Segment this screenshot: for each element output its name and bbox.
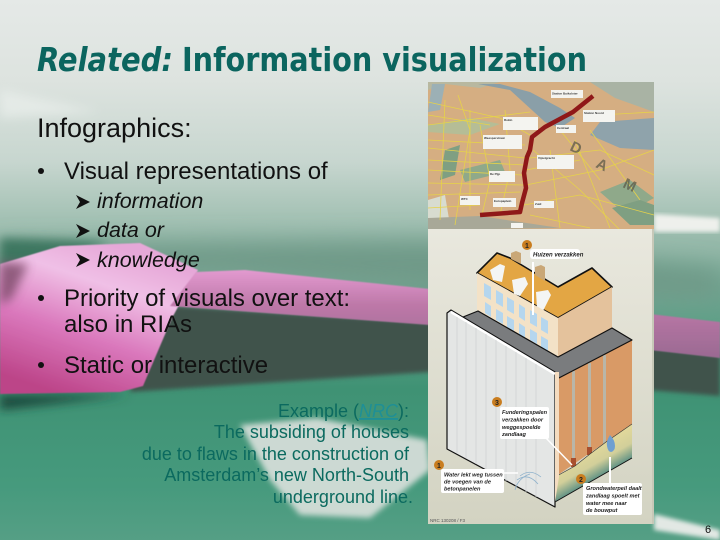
bullet: priority of visuals: Priority of visuals over text:	[64, 285, 350, 312]
bullet: visual representations: Visual representations of	[64, 158, 328, 185]
bullet: priority of visuals: also in RIAs	[64, 311, 192, 338]
callout: groundwater: Grondwaterpeil daalt	[586, 486, 643, 492]
page number: 6	[705, 524, 711, 536]
station labels	[460, 90, 615, 228]
credit: NRC 130208 / F3	[430, 518, 466, 523]
callout: foundation piles: Funderingspalen	[502, 410, 548, 416]
station labels: WTC	[461, 197, 469, 201]
callout: water leaks: Water lekt weg tussen	[444, 472, 503, 478]
marker 2: 2	[579, 477, 583, 484]
map lettering	[567, 138, 639, 196]
callout: groundwater	[583, 457, 643, 515]
station labels: Rokin	[504, 118, 513, 122]
title: Related:	[37, 40, 173, 79]
sub-list: information, data, knowledge: data or	[97, 218, 165, 242]
title: Information visualization	[182, 40, 587, 79]
dormers	[490, 264, 551, 311]
facade left	[477, 273, 558, 357]
callout: groundwater: de bouwput	[586, 508, 619, 514]
callout: groundwater: zandlaag spoelt met	[585, 494, 641, 500]
station labels: Centraal	[557, 126, 569, 130]
bullet list	[38, 158, 350, 379]
map of the metro line	[428, 82, 654, 230]
callout: water leaks	[441, 469, 518, 493]
bullet: static or interactive: Static or interactive	[64, 352, 268, 379]
roof	[477, 253, 612, 318]
soil layer	[555, 424, 632, 502]
station labels: De Pijp	[490, 172, 500, 176]
callout: foundation piles: weggespoelde	[502, 425, 541, 431]
marker 1 bottom: 1	[437, 463, 441, 470]
marker 1 top: 1	[525, 243, 529, 250]
callout: water leaks: de voegen van de	[444, 480, 491, 486]
map lettering: D	[567, 138, 584, 158]
facade right	[558, 287, 612, 357]
marker 1 bottom	[434, 460, 444, 470]
windows	[484, 283, 548, 351]
callout: foundation piles	[500, 407, 572, 465]
sub-list: information, data, knowledge	[76, 189, 203, 272]
groundwater drop	[607, 435, 615, 452]
station labels: Zuid	[535, 202, 541, 206]
callout: houses subside	[530, 249, 584, 315]
building cross-section illustration	[428, 229, 654, 524]
marker 3: 3	[495, 400, 499, 407]
example caption: Example (NRC):	[278, 401, 409, 421]
sheet pile wall	[447, 310, 555, 507]
metro route	[480, 96, 593, 215]
station labels: Europaplein	[494, 199, 512, 203]
example caption: Amsterdam’s new North-South	[164, 465, 409, 485]
callout: foundation piles: zandlaag	[501, 432, 527, 438]
station labels: Station Noord	[584, 111, 604, 115]
bullet: priority of visuals	[38, 285, 350, 338]
sub-list: information, data, knowledge: information	[97, 189, 203, 213]
map lettering: A	[593, 155, 610, 175]
heading: infographics: Infographics:	[37, 113, 192, 143]
callout: water leaks: betonpanelen	[444, 486, 481, 492]
brick foundation wall	[555, 340, 632, 477]
station labels: Vijzelgracht	[538, 156, 555, 160]
sub-list: information, data, knowledge: knowledge	[97, 248, 200, 272]
marker 1 top	[522, 240, 532, 250]
grey ledge	[463, 311, 632, 380]
example caption: The subsiding of houses	[214, 422, 409, 442]
title	[37, 40, 587, 79]
callout: houses subside: Huizen verzakken	[533, 252, 584, 258]
example caption	[142, 401, 413, 507]
station labels: Weesperstraat	[484, 136, 505, 140]
water seep	[515, 472, 541, 490]
example caption: due to flaws in the construction of	[142, 444, 410, 464]
map lettering: M	[620, 175, 639, 196]
callout: foundation piles: verzakken door	[502, 418, 544, 424]
marker 3	[492, 397, 502, 407]
station labels: Station Buiksloter	[552, 92, 579, 96]
example caption: underground line.	[273, 487, 413, 507]
marker 2	[576, 474, 586, 484]
callout: groundwater: water mee naar	[586, 501, 628, 507]
chimneys	[511, 251, 521, 264]
